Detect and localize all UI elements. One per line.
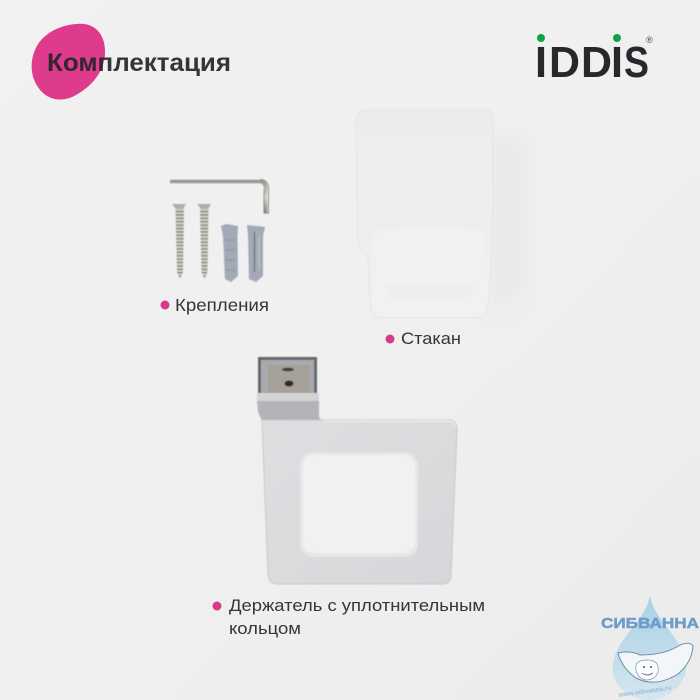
icon: screw right bbox=[197, 204, 211, 279]
icon: wall plug right bbox=[247, 225, 265, 282]
logo: IDDIS: I bbox=[611, 38, 623, 87]
logo: IDDIS: D bbox=[549, 38, 580, 87]
watermark: Sibvanna: www.sibvanna.ru bbox=[617, 685, 672, 699]
label: fasteners: Крепления bbox=[175, 295, 269, 315]
icon: wall plug left bbox=[221, 224, 238, 282]
title: Комплектация bbox=[47, 49, 231, 77]
label: holder with seal ring: кольцом bbox=[229, 619, 301, 638]
metal plate bbox=[262, 420, 457, 584]
logo: IDDIS: D bbox=[581, 38, 612, 87]
logo: IDDIS: S bbox=[624, 38, 649, 87]
mount bracket bbox=[257, 357, 323, 421]
label: holder with seal ring: Держатель с уплотнительным bbox=[229, 596, 485, 615]
watermark: Sibvanna bbox=[601, 596, 699, 700]
pink blob bbox=[32, 24, 105, 100]
glass shadow bbox=[490, 130, 525, 310]
glass tumbler bbox=[356, 110, 493, 318]
icon: screw left bbox=[172, 204, 186, 279]
watermark: Sibvanna: СИБВАННА bbox=[601, 615, 699, 632]
holder bbox=[257, 357, 457, 584]
logo: IDDIS bbox=[535, 34, 653, 87]
plate opening bbox=[300, 452, 418, 557]
label: glass: Стакан bbox=[401, 329, 461, 348]
label: holder with seal ring bbox=[212, 596, 485, 638]
logo: IDDIS: ® bbox=[646, 35, 653, 45]
icon: hex wrench bbox=[170, 180, 268, 213]
logo: IDDIS: I bbox=[535, 38, 547, 87]
